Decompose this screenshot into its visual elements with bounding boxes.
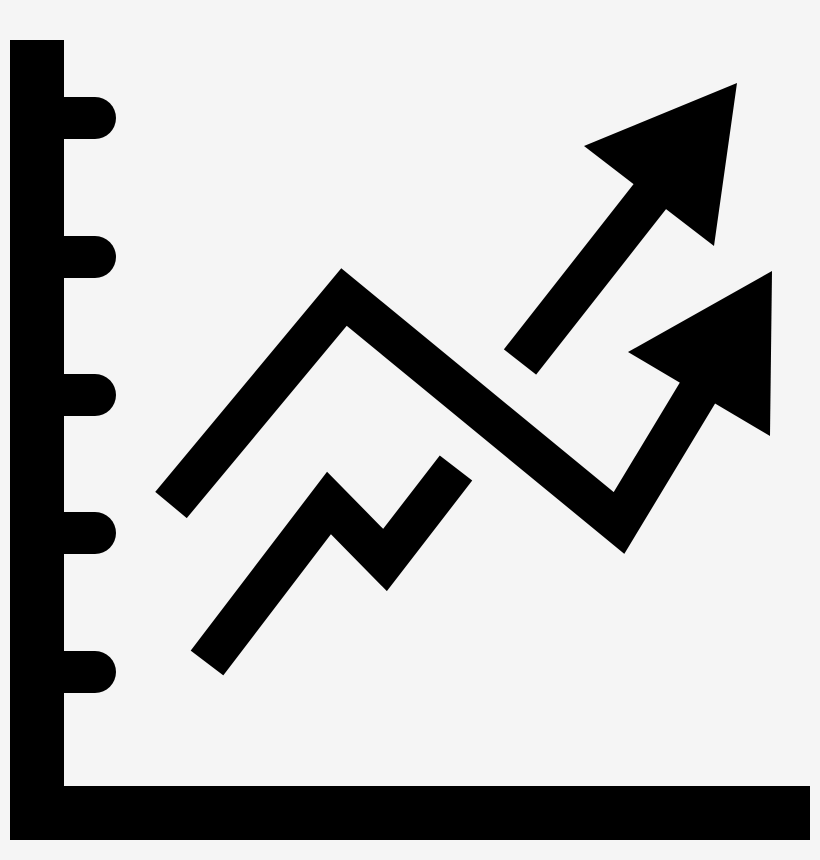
straight arrow (520, 83, 737, 362)
upper trend line with arrow (171, 271, 772, 523)
lower zigzag line (207, 468, 456, 663)
axis ticks (60, 118, 95, 672)
